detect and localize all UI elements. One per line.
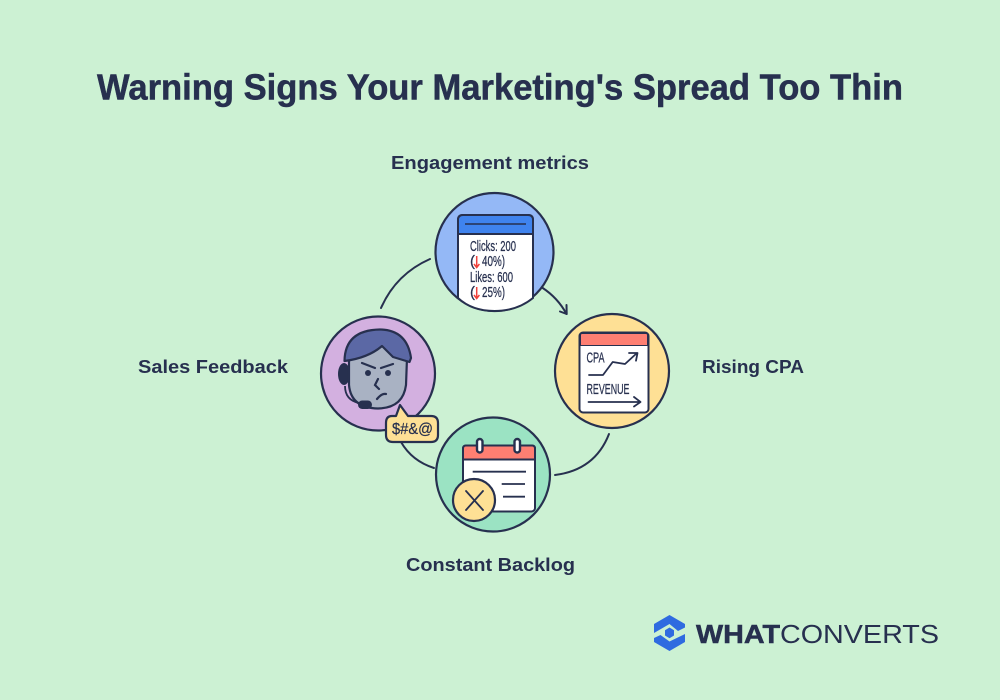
arrow: sales feedback to engagement: [381, 259, 430, 308]
label: Engagement metrics: Engagement metrics: [391, 152, 589, 173]
metrics text: [470, 238, 516, 301]
face: [349, 345, 407, 408]
logo mark: [654, 615, 685, 651]
metrics text: Clicks: 200: [470, 238, 516, 255]
speech bubble: $#&@: [392, 421, 433, 438]
arrow: backlog to sales feedback: [401, 442, 434, 468]
arrow: rising CPA to backlog: [555, 434, 609, 475]
REVENUE label: REVENUE: [586, 381, 630, 398]
face details: [362, 363, 393, 399]
wordmark: WHAT CONVERTS: [696, 619, 939, 649]
title: Warning Signs Your Marketing's Spread Too Thin: [97, 66, 903, 108]
label: Rising CPA: Rising CPA: [702, 356, 804, 377]
flat line: [588, 397, 640, 406]
headset ear cup: [338, 363, 350, 385]
metrics text: (: [470, 284, 475, 301]
arrow: engagement to rising CPA: [542, 288, 567, 314]
icon: angry sales agent: [321, 316, 438, 442]
x badge: [453, 479, 495, 521]
rising line: [589, 353, 638, 375]
metrics text: 40%): [482, 253, 505, 270]
icon: engagement metrics report: [436, 193, 554, 311]
label: Constant Backlog: Constant Backlog: [406, 554, 575, 575]
headset mic: [345, 386, 359, 403]
logo: WhatConverts: [654, 615, 939, 651]
metrics text: Likes: 600: [470, 269, 513, 286]
hair: [344, 330, 411, 362]
metrics text: 25%): [482, 284, 505, 301]
icon: constant backlog calendar: [436, 418, 550, 532]
icon: rising CPA chart: [555, 314, 669, 428]
label: Sales Feedback: Sales Feedback: [138, 356, 289, 377]
metrics text: (: [470, 253, 475, 270]
CPA label: CPA: [586, 350, 604, 366]
